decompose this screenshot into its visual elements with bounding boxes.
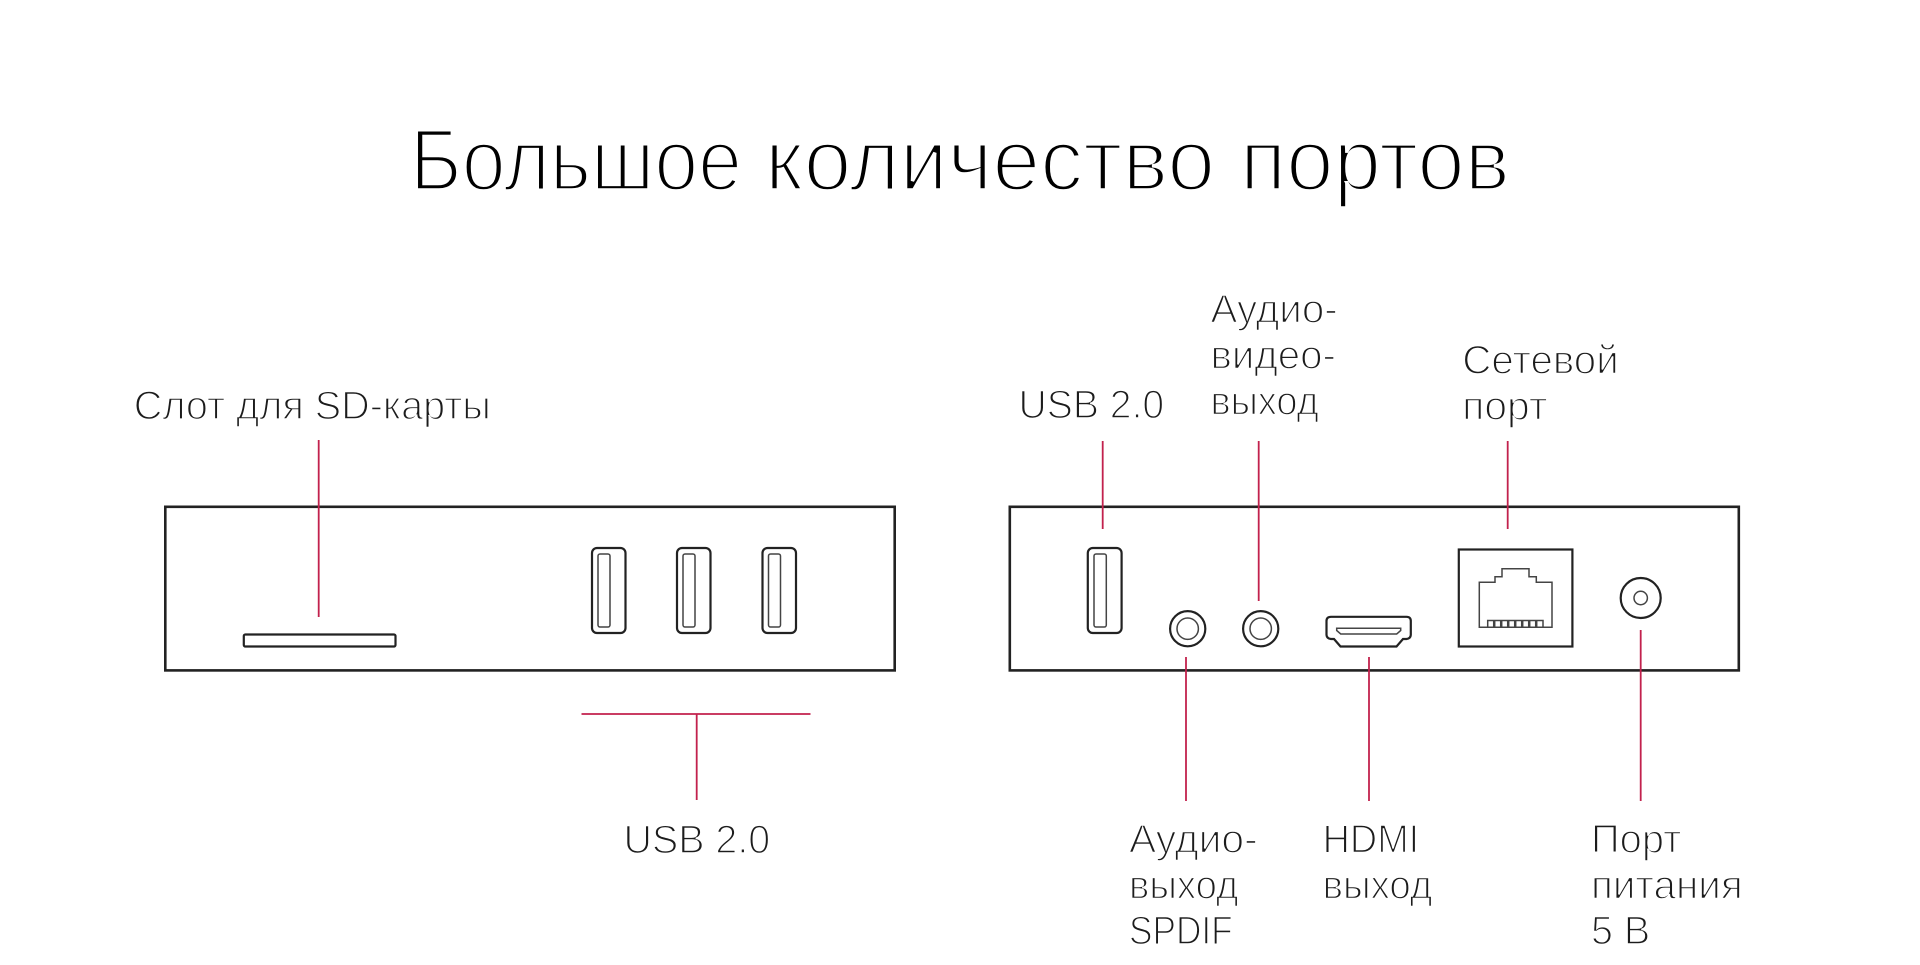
label: HDMI output: HDMI bbox=[1323, 818, 1419, 862]
port: AV jack bbox=[1243, 611, 1278, 646]
leader line: SPDIF bbox=[1185, 657, 1187, 801]
title: портов bbox=[1240, 112, 1510, 209]
panel: left device side bbox=[165, 507, 895, 670]
port: power bbox=[1621, 578, 1661, 618]
port: SPDIF jack bbox=[1170, 611, 1205, 646]
label: network port bbox=[1462, 338, 1619, 428]
bracket: USB group bbox=[582, 714, 810, 800]
port: USB 2 bbox=[677, 548, 710, 633]
label: SPDIF audio output: Аудио- bbox=[1129, 818, 1258, 862]
leader line: power bbox=[1640, 630, 1642, 801]
label: power port bbox=[1591, 818, 1743, 953]
leader line: SD card slot bbox=[318, 440, 320, 617]
title: количество bbox=[765, 112, 1215, 209]
port: USB 3 bbox=[762, 548, 796, 633]
label: power port: питания bbox=[1591, 864, 1743, 908]
label: SPDIF audio output: SPDIF bbox=[1129, 909, 1233, 953]
label: HDMI output: выход bbox=[1323, 864, 1432, 908]
label: network port: Сетевой bbox=[1462, 338, 1619, 382]
label: HDMI output bbox=[1323, 818, 1432, 908]
leader line: AV output bbox=[1258, 441, 1260, 601]
label: AV output: видео- bbox=[1210, 334, 1336, 378]
leader line: network bbox=[1507, 441, 1509, 529]
leader line: USB right bbox=[1102, 441, 1104, 529]
panel: right device side bbox=[1010, 507, 1739, 670]
label: SD card slot: Слот для SD-карты bbox=[134, 384, 491, 428]
label: SPDIF audio output bbox=[1129, 818, 1258, 953]
label: USB 2.0 bottom: USB 2.0 bbox=[624, 818, 770, 862]
label: AV output bbox=[1210, 288, 1338, 424]
leader line: HDMI bbox=[1368, 657, 1370, 801]
label: power port: 5 В bbox=[1591, 909, 1650, 953]
title bbox=[410, 112, 1510, 209]
port: HDMI bbox=[1326, 617, 1411, 646]
label: network port: порт bbox=[1462, 384, 1548, 428]
title: Большое bbox=[410, 112, 742, 209]
label: USB 2.0 top: USB 2.0 bbox=[1018, 383, 1164, 427]
label: power port: Порт bbox=[1591, 818, 1681, 862]
label: AV output: Аудио- bbox=[1210, 288, 1338, 332]
label: SPDIF audio output: выход bbox=[1129, 864, 1238, 908]
port: SD card slot bbox=[244, 634, 396, 646]
port: USB 1 bbox=[592, 548, 626, 633]
device body: right bbox=[1010, 507, 1739, 670]
port: USB bbox=[1088, 548, 1122, 633]
label: AV output: выход bbox=[1210, 380, 1319, 424]
device body: left bbox=[165, 507, 895, 670]
port: Ethernet bbox=[1459, 550, 1572, 646]
